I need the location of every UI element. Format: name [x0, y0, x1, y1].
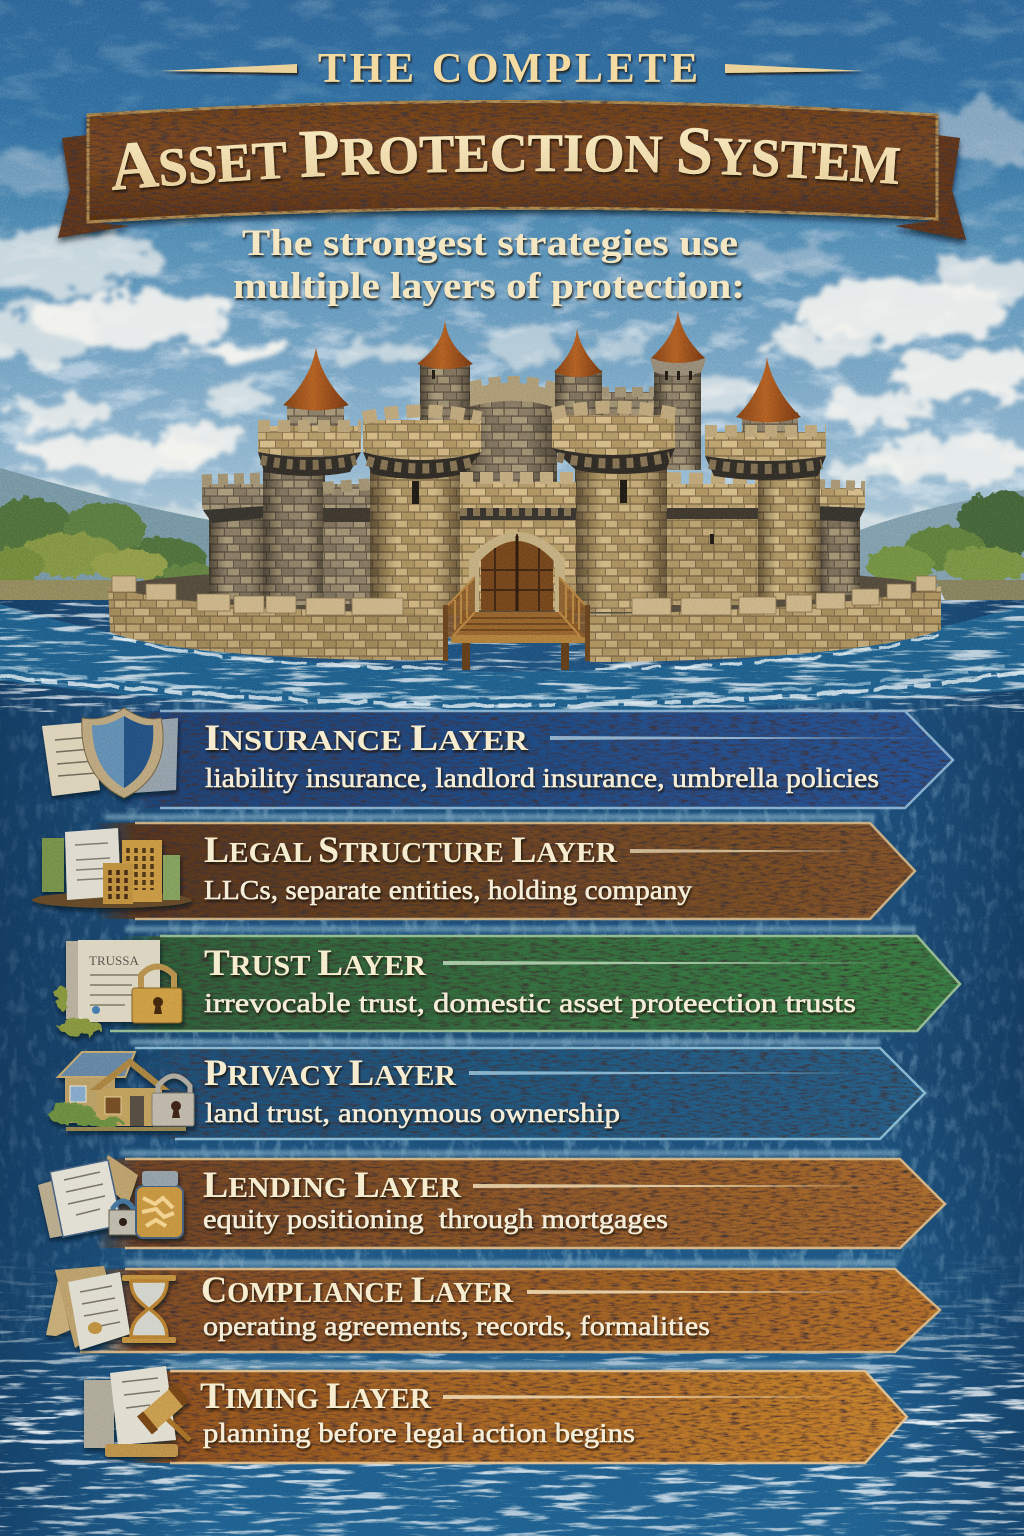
icon: mortgage documents and jar — [38, 1155, 183, 1238]
subtitle: multiple layers of protection: — [233, 266, 745, 307]
castle — [108, 310, 941, 670]
castle door — [481, 534, 553, 611]
banner trim — [80, 1269, 940, 1352]
banner shape — [95, 823, 915, 919]
layer 2: legal structure — [32, 823, 915, 919]
centre right great tower — [552, 407, 675, 612]
layer 5: lending — [38, 1155, 945, 1248]
banner trim — [160, 711, 953, 808]
divider line — [469, 1071, 862, 1075]
icon: house with padlock — [48, 1052, 194, 1131]
water highlight above legal banner — [105, 814, 875, 820]
description: equity positioning through mortgages — [203, 1204, 668, 1234]
outer ring back wall — [109, 566, 941, 614]
banner shape — [120, 936, 960, 1031]
ribbon tails — [58, 135, 966, 240]
moat waves — [0, 600, 1024, 712]
water highlight above timing banner — [170, 1362, 870, 1368]
left curtain wall — [323, 484, 373, 604]
foam at wall base — [112, 634, 938, 668]
heading: COMPLIANCE LAYER — [201, 1270, 514, 1311]
layer 1: insurance — [42, 708, 953, 808]
subtitle: The strongest strategies use — [242, 223, 738, 264]
divider line — [630, 849, 862, 853]
heading: LEGAL STRUCTURE LAYER — [204, 830, 618, 871]
ribbon body — [88, 102, 937, 222]
sky background — [0, 0, 1024, 620]
banner trim — [125, 1159, 945, 1248]
banner shape — [95, 1269, 940, 1352]
description: operating agreements, records, formalities — [203, 1311, 710, 1341]
heading: LENDING LAYER — [203, 1165, 462, 1206]
banner shape — [120, 711, 953, 808]
central keep — [452, 381, 557, 482]
water highlight above privacy banner — [130, 1039, 880, 1045]
divider line — [473, 1184, 882, 1188]
heading: TRUST LAYER — [204, 943, 427, 984]
water texture — [0, 600, 1024, 1536]
description: planning before legal action begins — [203, 1418, 635, 1448]
divider line — [527, 1290, 882, 1294]
distant hills and shoreline left — [0, 468, 218, 614]
description: liability insurance, landlord insurance, umbrella policies — [205, 763, 879, 793]
heading: PRIVACY LAYER — [204, 1053, 457, 1094]
divider line — [443, 1395, 852, 1399]
far left tower — [202, 478, 267, 600]
icon: documents and buildings — [32, 828, 192, 908]
layer 4: privacy — [48, 1048, 925, 1139]
wooden bridge — [443, 577, 590, 670]
icon: trust deed and padlock — [56, 940, 182, 1035]
banner trim — [110, 936, 960, 1031]
banner shape — [95, 1159, 945, 1248]
outer ring wall right — [590, 576, 941, 662]
distant hills and shoreline right — [860, 490, 1024, 612]
far right tower — [816, 484, 865, 595]
water highlight above compliance banner — [125, 1260, 895, 1266]
tallest rear tower — [650, 310, 706, 470]
top heading: THE COMPLETE — [160, 46, 865, 92]
heading: TIMING LAYER — [200, 1376, 432, 1417]
layer 3: trust — [56, 936, 960, 1035]
right curtain wall — [667, 478, 762, 605]
banner trim — [135, 823, 915, 919]
divider line — [443, 961, 902, 965]
top heading: THE COMPLETE: THE COMPLETE — [318, 46, 698, 92]
subtitle — [233, 223, 745, 307]
left great tower — [258, 347, 361, 605]
icon: documents and gavel — [84, 1366, 190, 1457]
water highlight above trust banner — [125, 926, 915, 932]
title ribbon — [54, 100, 969, 248]
description: LLCs, separate entities, holding company — [204, 875, 693, 905]
banner trim — [135, 1048, 925, 1139]
icon: shield with papers — [42, 708, 178, 798]
layer 6: compliance — [46, 1266, 940, 1352]
lower water background — [0, 600, 1024, 1536]
layer 7: timing — [84, 1366, 907, 1463]
banner shape — [130, 1371, 907, 1463]
clouds — [0, 0, 1024, 560]
divider line — [550, 736, 925, 740]
water highlight above lending banner — [120, 1150, 900, 1156]
battlement blocks left — [112, 576, 403, 615]
icon: trust deed and padlock: TRUSSA — [89, 953, 139, 968]
back right battlement — [598, 392, 673, 462]
battlement blocks right — [632, 576, 936, 615]
turret behind left centre — [417, 320, 473, 422]
description: land trust, anonymous ownership — [205, 1098, 620, 1128]
main title text: ASSET PROTECTION SYSTEM — [112, 128, 902, 194]
turret behind right centre — [554, 328, 602, 420]
icon: papers and hourglass — [46, 1266, 176, 1350]
outer ring wall left — [108, 576, 447, 660]
gatehouse — [460, 478, 576, 612]
right great tower — [705, 357, 826, 600]
heading: INSURANCE LAYER — [204, 718, 529, 759]
banner shape — [140, 1048, 925, 1139]
banner trim — [170, 1371, 907, 1463]
description: irrevocable trust, domestic asset proteection trusts — [204, 988, 856, 1018]
centre left great tower — [363, 411, 481, 615]
